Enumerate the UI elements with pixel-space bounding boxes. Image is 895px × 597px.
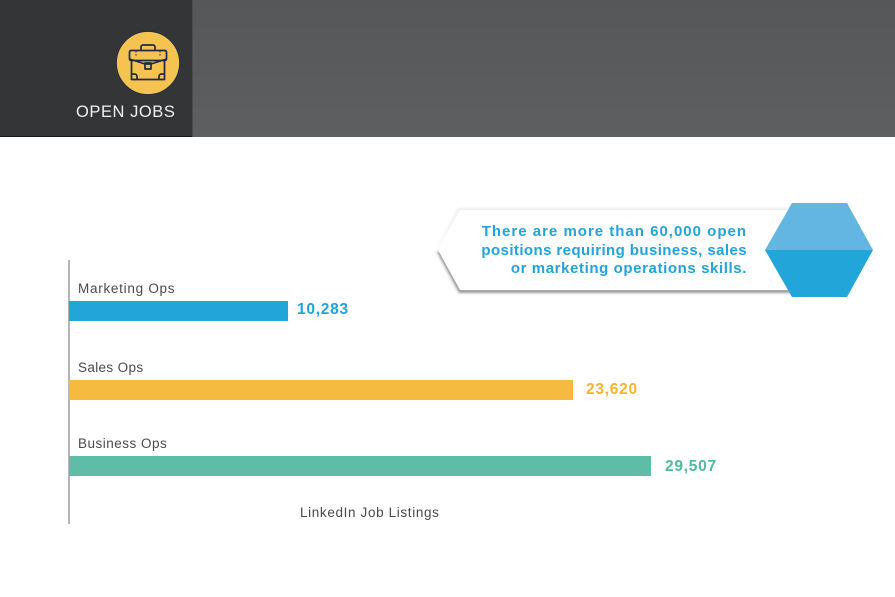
icon: briefcase xyxy=(116,31,180,95)
callout xyxy=(436,203,873,297)
tab title: OPEN JOBS xyxy=(76,103,175,121)
header band xyxy=(0,0,895,137)
bar: business ops xyxy=(69,456,651,476)
label: sales ops: Sales Ops xyxy=(78,360,143,375)
label: marketing ops: Marketing Ops xyxy=(78,281,175,296)
value: business ops: 29,507 xyxy=(665,458,717,475)
callout text: or marketing operations skills. xyxy=(511,260,747,277)
bar: marketing ops xyxy=(69,301,288,321)
axis line xyxy=(68,260,70,524)
callout text: positions requiring business, sales xyxy=(481,242,747,258)
value: sales ops: 23,620 xyxy=(586,381,638,398)
callout arrow shape xyxy=(436,203,873,297)
bar: sales ops xyxy=(69,380,573,400)
value: marketing ops: 10,283 xyxy=(297,301,349,318)
bar chart xyxy=(68,260,717,524)
label: business ops: Business Ops xyxy=(78,436,167,451)
panel: open jobs tab xyxy=(0,0,193,137)
callout text: There are more than 60,000 open xyxy=(482,223,747,240)
axis title: LinkedIn Job Listings xyxy=(300,505,440,520)
hexagon xyxy=(765,203,873,297)
callout text xyxy=(481,223,747,277)
